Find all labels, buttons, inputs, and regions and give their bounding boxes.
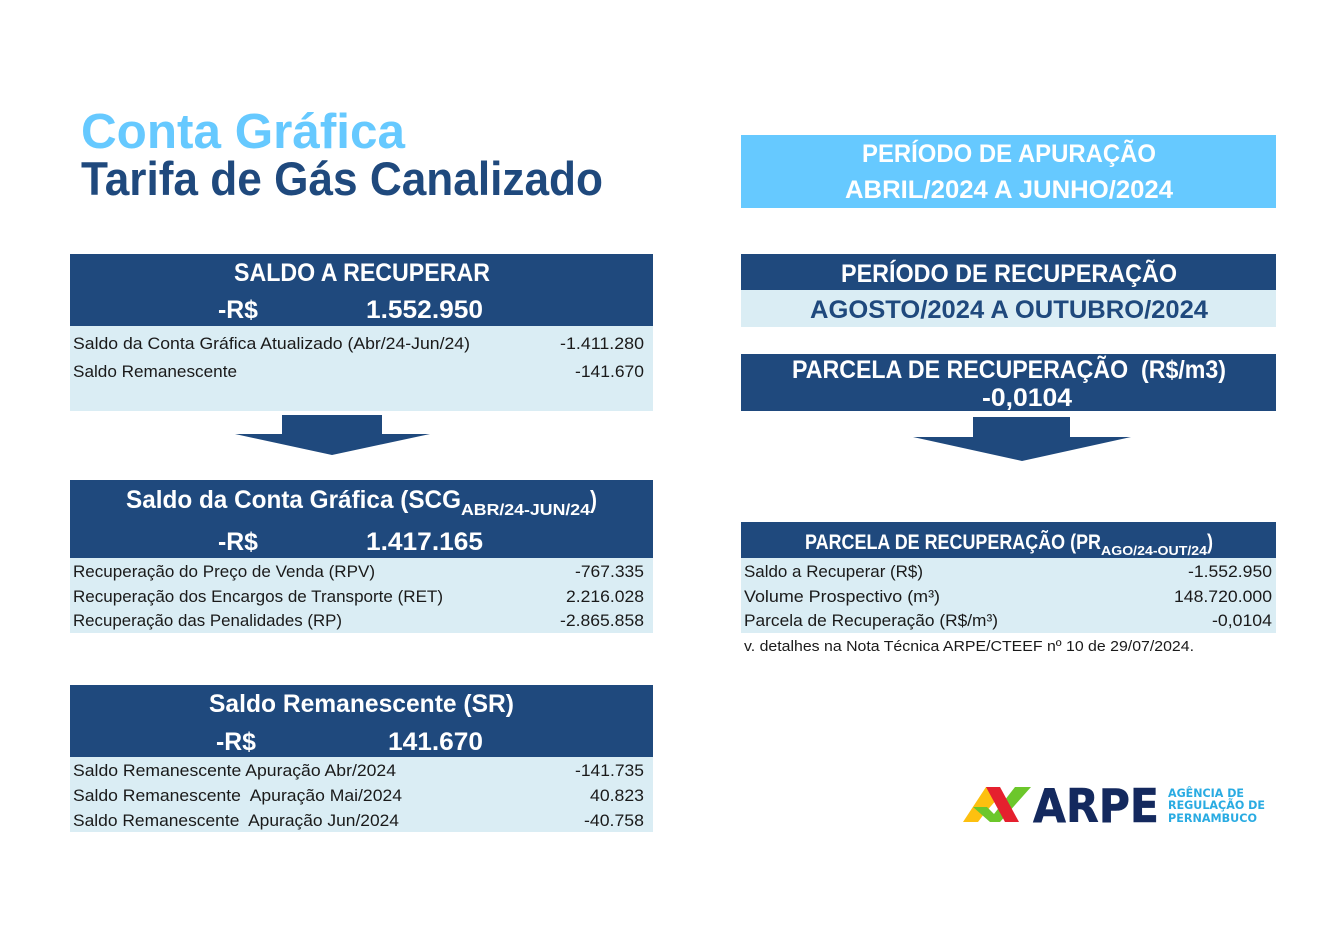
- panel: período de apuração: [741, 135, 1276, 208]
- panel: período de apuração: ABRIL/2024 A JUNHO/2024: [845, 176, 1173, 204]
- panel: saldo da conta gráfica: -767.335: [575, 562, 644, 581]
- panel: período de apuração: PERÍODO DE APURAÇÃO: [862, 138, 1156, 168]
- panel: parcela de recuperação detalhes: -0,0104: [1212, 611, 1272, 630]
- logo subtitle: REGULAÇÃO DE: [1168, 797, 1265, 812]
- panel: saldo a recuperar: [70, 254, 653, 411]
- panel: saldo da conta gráfica: Saldo da Conta Gráfica (SCG: [126, 486, 461, 514]
- panel: saldo remanescente: -40.758: [584, 811, 644, 830]
- logo subtitle: PERNAMBUCO: [1168, 811, 1257, 825]
- panel: saldo a recuperar: -1.411.280: [560, 334, 644, 353]
- panel: parcela de recuperação detalhes: 148.720.000: [1174, 587, 1272, 606]
- arrow: right: [913, 417, 1131, 461]
- panel: parcela de recuperação detalhes: Saldo a Recuperar (R$): [744, 562, 923, 581]
- panel: saldo da conta gráfica: -R$: [218, 528, 258, 556]
- panel: saldo a recuperar: -R$: [218, 296, 258, 324]
- panel: saldo remanescente: 40.823: [590, 786, 644, 805]
- panel: saldo a recuperar: -141.670: [575, 362, 644, 381]
- panel: saldo da conta gráfica: ): [590, 486, 597, 514]
- panel: parcela de recuperação valor: PARCELA DE RECUPERAÇÃO (R$/m3): [792, 354, 1226, 384]
- panel: parcela de recuperação detalhes: Volume Prospectivo (m³): [744, 587, 940, 606]
- panel: saldo da conta gráfica: Recuperação dos Encargos de Transporte (RET): [73, 587, 443, 606]
- panel: saldo remanescente: 141.670: [388, 728, 483, 756]
- panel: parcela de recuperação detalhes: AGO/24-OUT/24: [1101, 543, 1208, 558]
- panel: saldo remanescente: Saldo Remanescente Apuração Jun/2024: [73, 811, 399, 830]
- panel: parcela de recuperação valor: [741, 354, 1276, 412]
- panel: saldo a recuperar: Saldo Remanescente: [73, 362, 237, 381]
- panel: saldo a recuperar: Saldo da Conta Gráfica Atualizado (Abr/24-Jun/24): [73, 334, 470, 353]
- panel: saldo a recuperar: 1.552.950: [366, 296, 483, 324]
- logo subtitle: [1168, 785, 1265, 825]
- panel: saldo da conta gráfica: 1.417.165: [366, 528, 483, 556]
- panel: saldo remanescente: Saldo Remanescente Apuração Abr/2024: [73, 761, 396, 780]
- panel: período de recuperação: PERÍODO DE RECUPERAÇÃO: [841, 258, 1177, 288]
- note: v. detalhes na Nota Técnica ARPE/CTEEF nº 10 de 29/07/2024.: [744, 638, 1194, 655]
- title: [81, 105, 603, 205]
- panel: saldo remanescente: -141.735: [575, 761, 644, 780]
- panel: parcela de recuperação detalhes: -1.552.950: [1188, 562, 1272, 581]
- panel: período de recuperação: [741, 254, 1276, 327]
- panel: saldo da conta gráfica: ABR/24-JUN/24: [461, 502, 590, 519]
- panel: saldo da conta gráfica: -2.865.858: [560, 611, 644, 630]
- panel: parcela de recuperação detalhes: PARCELA DE RECUPERAÇÃO (PR: [805, 531, 1101, 554]
- panel: saldo remanescente: [70, 685, 653, 832]
- panel: saldo remanescente: Saldo Remanescente Apuração Mai/2024: [73, 786, 402, 805]
- logo subtitle: AGÊNCIA DE: [1168, 785, 1244, 800]
- title: Conta Gráfica: [81, 105, 406, 159]
- panel: parcela de recuperação detalhes: Parcela de Recuperação (R$/m³): [744, 611, 998, 630]
- panel: saldo a recuperar: SALDO A RECUPERAR: [234, 259, 490, 287]
- arrow: left: [235, 415, 430, 455]
- panel: parcela de recuperação detalhes: ): [1207, 531, 1213, 554]
- icon: ARPE mark: [963, 787, 1031, 822]
- panel: saldo remanescente: -R$: [216, 728, 256, 756]
- panel: saldo da conta gráfica: [70, 480, 653, 633]
- panel: parcela de recuperação detalhes: [741, 522, 1276, 633]
- title: Tarifa de Gás Canalizado: [81, 152, 603, 205]
- panel: saldo da conta gráfica: Recuperação do Preço de Venda (RPV): [73, 562, 375, 581]
- panel: parcela de recuperação valor: -0,0104: [982, 384, 1072, 412]
- panel: saldo da conta gráfica: Recuperação das Penalidades (RP): [73, 611, 342, 630]
- panel: saldo remanescente: Saldo Remanescente (SR): [209, 690, 514, 718]
- panel: saldo da conta gráfica: 2.216.028: [566, 587, 644, 606]
- panel: período de recuperação: AGOSTO/2024 A OUTUBRO/2024: [810, 296, 1208, 324]
- logo: ARPE: [963, 779, 1265, 833]
- logo wordmark: ARPE: [1033, 779, 1159, 833]
